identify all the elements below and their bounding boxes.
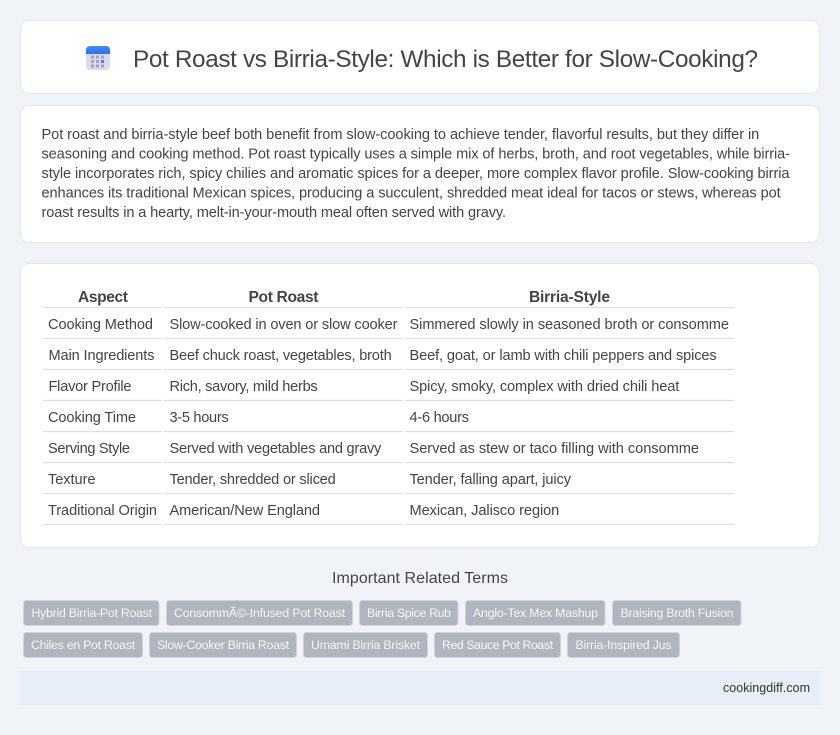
row: serving style: Served as stew or taco filling with consomme (410, 441, 699, 457)
tag (434, 632, 560, 658)
row: traditional origin: American/New England (170, 503, 320, 519)
row: traditional origin: Mexican, Jalisco region (410, 503, 559, 519)
row: flavor profile (43, 379, 734, 400)
row: main ingredients: Beef chuck roast, vegetables, broth (170, 348, 392, 364)
tag: ConsommÃ©-Infused Pot Roast (174, 606, 346, 620)
row: serving style (43, 441, 734, 462)
tag (24, 632, 142, 658)
summary text block: style incorporates rich, spicy chilies and aromatic spices for a deeper, more complex flavor profile. Slow-cooking birria (42, 166, 790, 182)
row: texture: Tender, shredded or sliced (170, 472, 336, 488)
row: texture: Texture (48, 472, 96, 488)
row: texture: Tender, falling apart, juicy (410, 472, 572, 488)
row: main ingredients (43, 348, 734, 370)
tag: Red Sauce Pot Roast (442, 638, 554, 652)
panel: summary (20, 106, 820, 242)
tag (360, 600, 458, 626)
tag: Anglo-Tex Mex Mashup (473, 606, 598, 620)
footer (20, 671, 820, 705)
summary text block: seasoning and cooking method. Pot roast typically uses a simple mix of herbs, broth, and root vegetables, while birria- (42, 146, 790, 162)
table header: Pot Roast (248, 289, 318, 306)
row: cooking method (43, 317, 734, 338)
row: cooking time: 4-6 hours (410, 410, 469, 426)
row: traditional origin: Traditional Origin (48, 503, 157, 519)
summary text block (42, 127, 790, 221)
table header: Aspect (78, 289, 128, 306)
tag (24, 600, 159, 626)
summary text block: roast results in a hearty, melt-in-your-mouth meal often served with gravy. (42, 205, 506, 221)
panel: header (20, 20, 820, 94)
row: main ingredients: Main Ingredients (48, 348, 154, 364)
panel: related term tags (24, 600, 741, 658)
summary text block: enhances its traditional Mexican spices, producing a succulent, shredded meat ideal for tacos or stews, whereas pot (42, 186, 781, 202)
row: flavor profile: Flavor Profile (48, 379, 132, 395)
row: traditional origin (43, 503, 734, 524)
panel: comparison table (20, 264, 820, 548)
tag (612, 600, 741, 626)
tag (568, 632, 680, 658)
tag: Braising Broth Fusion (620, 606, 734, 620)
row: flavor profile: Spicy, smoky, complex with dried chili heat (410, 379, 679, 395)
tag: Chiles en Pot Roast (31, 638, 136, 652)
row: cooking method: Slow-cooked in oven or slow cooker (170, 317, 398, 333)
row: cooking time: 3-5 hours (170, 410, 229, 426)
tag: Hybrid Birria-Pot Roast (32, 606, 153, 620)
row: flavor profile: Rich, savory, mild herbs (170, 379, 318, 395)
row: serving style: Served with vegetables and gravy (170, 441, 382, 457)
tag (150, 632, 296, 658)
tag: Birria Spice Rub (367, 606, 451, 620)
row: texture (43, 472, 734, 494)
tag (304, 632, 428, 658)
row: serving style: Serving Style (48, 441, 130, 457)
summary text block: Pot roast and birria-style beef both benefit from slow-cooking to achieve tender, flavorful results, but they differ in (42, 127, 759, 143)
row: main ingredients: Beef, goat, or lamb with chili peppers and spices (410, 348, 717, 364)
tag (466, 600, 605, 626)
footer: cookingdiff.com (723, 681, 810, 695)
tag: Slow-Cooker Birria Roast (157, 638, 290, 652)
icon: calendar (86, 46, 110, 70)
title: Pot Roast vs Birria-Style: Which is Better for Slow-Cooking? (133, 46, 758, 73)
table header (43, 289, 734, 308)
tag: Birria-Inspired Jus (576, 638, 672, 652)
row: cooking time: Cooking Time (48, 410, 136, 426)
tag: Umami Birria Brisket (311, 638, 421, 652)
table header: Birria-Style (529, 289, 610, 306)
row: cooking method: Cooking Method (48, 317, 153, 333)
row: cooking time (43, 410, 734, 432)
tag (166, 600, 352, 626)
heading: related terms: Important Related Terms (332, 570, 508, 587)
row: cooking method: Simmered slowly in seasoned broth or consomme (410, 317, 729, 333)
